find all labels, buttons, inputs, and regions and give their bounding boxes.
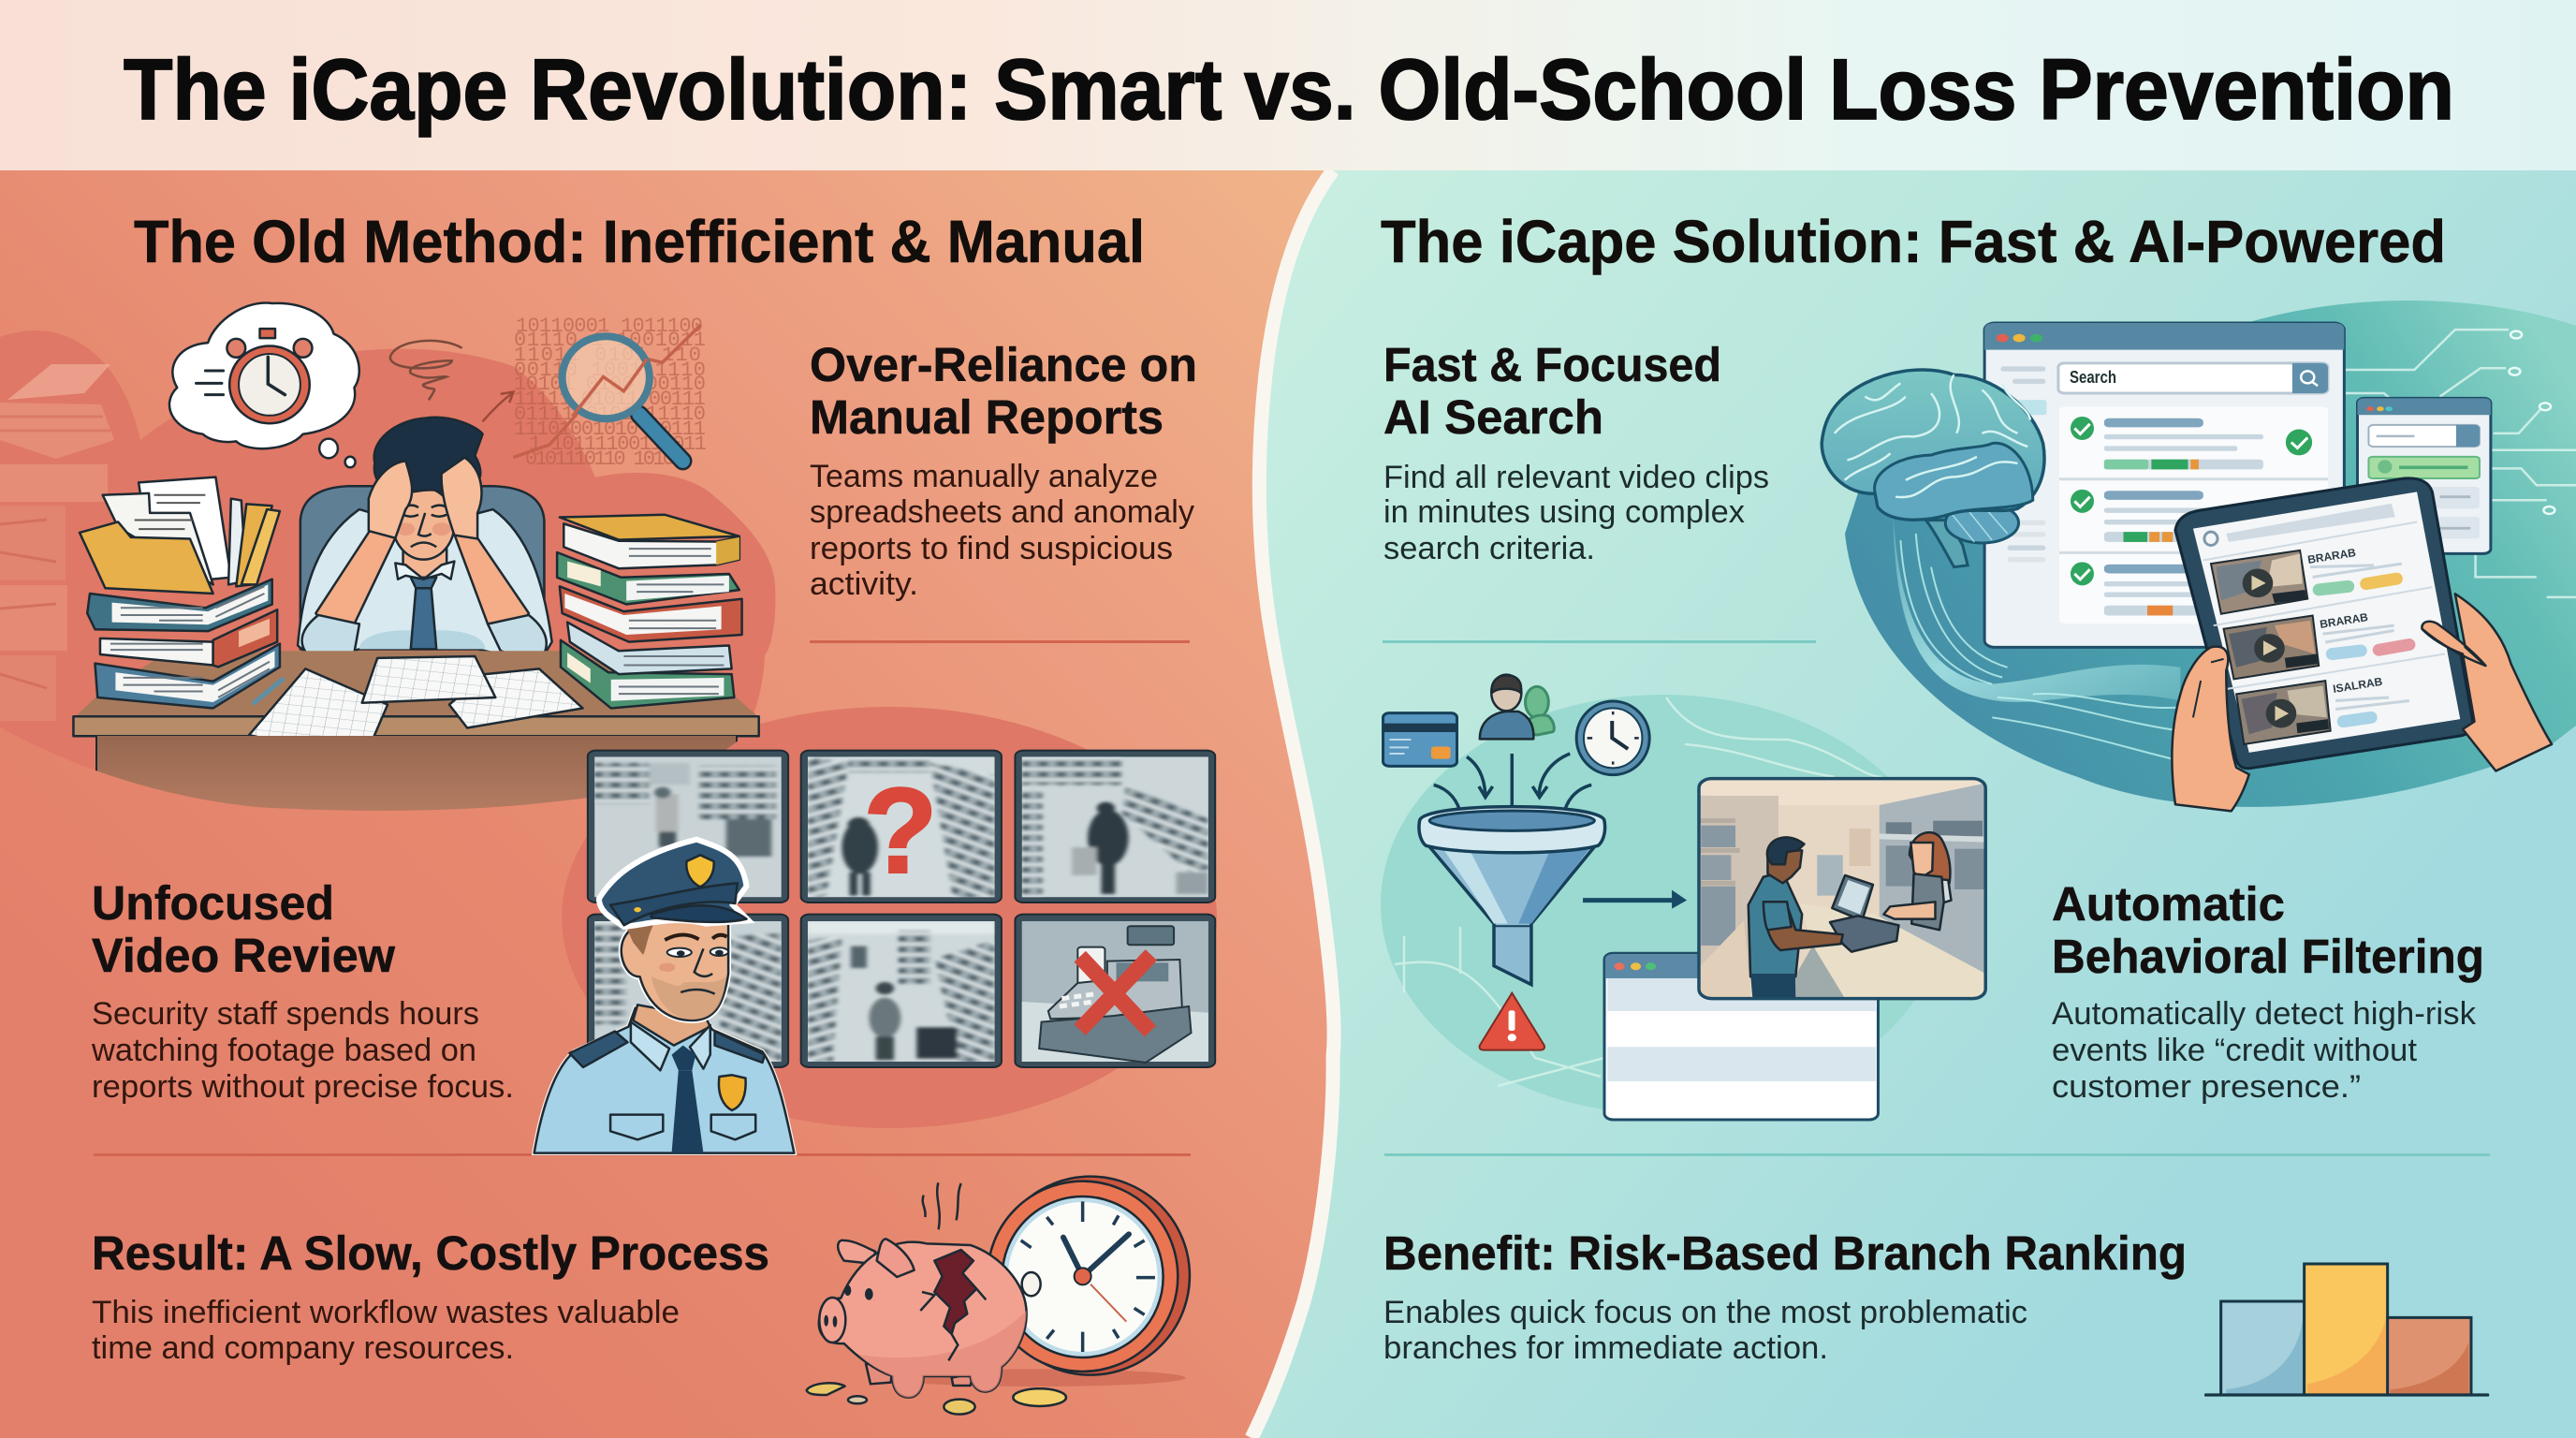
bar: yellow <box>2305 1264 2388 1395</box>
text block: over-reliance on manual reports: spreadsheets and anomaly <box>810 494 1194 530</box>
bar: blue <box>2221 1301 2305 1395</box>
worker <box>298 418 552 664</box>
tablet video labels: ISALRAB <box>2332 675 2383 696</box>
binary data background: 11011 0101 110 <box>514 344 701 367</box>
input arrows <box>1434 754 1591 821</box>
icon: people <box>1480 675 1554 739</box>
icon: stress squiggle <box>390 341 462 400</box>
baseline <box>2204 1393 2489 1397</box>
text block: automatic behavioral filtering: Behavioral Filtering <box>2052 930 2484 983</box>
stack: left binders and folder <box>80 477 283 708</box>
result row 2 <box>2071 490 2263 542</box>
binary data background: 10110001 1011100 <box>516 315 703 338</box>
text block: automatic behavioral filtering: events like “credit without <box>2052 1033 2418 1068</box>
text block: unfocused video review <box>91 876 514 1105</box>
stack: right binders <box>557 515 742 708</box>
left blob behind desk <box>0 330 775 811</box>
heading: old method: The Old Method: Inefficient & Manual <box>134 208 1145 275</box>
right bottom round shape <box>1381 695 1946 1114</box>
main search window <box>1984 323 2344 647</box>
curved divider <box>1251 170 1334 1438</box>
text block: over-reliance on manual reports: Teams manually analyze <box>810 459 1158 494</box>
text block: unfocused video review: reports without precise focus. <box>92 1069 514 1105</box>
icon: question mark: ? <box>863 762 938 899</box>
icon: credit card <box>1383 713 1457 766</box>
text block: over-reliance on manual reports: Over-Reliance on <box>810 338 1197 391</box>
binary data background: 01110 1 1001011 <box>514 329 706 352</box>
clock <box>988 1177 1190 1375</box>
monitor 5 <box>801 915 1002 1067</box>
icon: brain <box>1822 370 2044 567</box>
text block: unfocused video review: Video Review <box>92 929 395 982</box>
coins <box>807 1383 1066 1415</box>
monitor 6 with cash register <box>1015 915 1215 1067</box>
text block: over-reliance on manual reports: activity. <box>810 566 918 602</box>
spreadsheets on desk <box>249 656 583 758</box>
video thumbnail 3 <box>2236 681 2331 744</box>
binary data background: 11111 01011 00111 <box>514 388 706 411</box>
text block: automatic behavioral filtering: customer presence.” <box>2052 1069 2361 1105</box>
text block: result <box>92 1226 769 1366</box>
tablet <box>2175 478 2473 769</box>
text block: automatic behavioral filtering: Automatic <box>2052 877 2285 931</box>
title: The iCape Revolution: Smart vs. Old-School Loss Prevention <box>124 42 2454 138</box>
small search window <box>2358 398 2491 553</box>
bar chart: branch ranking <box>2204 1264 2489 1397</box>
illustration: stressed worker at desk <box>73 303 759 758</box>
text block: over-reliance on manual reports: Manual Reports <box>810 390 1164 444</box>
text block: over-reliance on manual reports: reports to find suspicious <box>810 531 1173 566</box>
desk <box>73 651 759 736</box>
left hand <box>2172 647 2249 811</box>
video thumbnail 1 <box>2211 550 2307 614</box>
text block: over-reliance on manual reports <box>810 338 1197 602</box>
right top teal shape <box>1845 301 2576 807</box>
arrow to photo <box>1583 898 1676 902</box>
icon: funnel <box>1419 807 1605 985</box>
woman <box>1910 832 1950 883</box>
binary data background <box>514 315 707 471</box>
text block: result: This inefficient workflow wastes valuable <box>92 1295 680 1330</box>
text block: fast and focused ai search: Find all relevant video clips <box>1383 460 1769 495</box>
text block: benefit: Benefit: Risk-Based Branch Ranking <box>1383 1226 2187 1280</box>
monitor 4 <box>588 915 788 1067</box>
binary data background: 00110 1001 1110 <box>514 359 706 382</box>
circuit lines <box>2346 330 2576 597</box>
text block: automatic behavioral filtering <box>2052 877 2484 1105</box>
chart: trend line <box>514 325 701 458</box>
desk lower body <box>95 736 738 811</box>
circuit traces in round shape <box>1395 697 1881 1086</box>
monitors and guard <box>534 751 1215 1153</box>
binary data background: 01111 0101 11110 <box>514 403 706 426</box>
lower blob behind monitors <box>562 707 1217 1128</box>
text block: unfocused video review: Unfocused <box>92 876 334 930</box>
binary data background: 0101110110 1010 <box>525 448 675 471</box>
text block: automatic behavioral filtering: Automatically detect high-risk <box>2052 996 2477 1032</box>
text block: result: Result: A Slow, Costly Process <box>92 1226 769 1280</box>
text block: result: time and company resources. <box>92 1330 514 1366</box>
monitor 3 <box>1015 751 1215 902</box>
text block: fast and focused ai search: in minutes using complex <box>1383 494 1745 530</box>
video thumbnail 2 <box>2224 615 2319 679</box>
result row 3 <box>2071 562 2263 615</box>
text block: unfocused video review: Security staff spends hours <box>92 996 479 1032</box>
store photo <box>1699 779 1985 999</box>
icon: magnifying glass <box>563 336 683 461</box>
tablet video labels: BRARAB <box>2306 546 2357 566</box>
icon: wall clock <box>1576 701 1649 775</box>
text block: fast and focused ai search: search criteria. <box>1383 531 1595 566</box>
chair <box>300 486 544 649</box>
bar: orange <box>2388 1317 2471 1395</box>
monitor 2 with question mark <box>801 751 1002 902</box>
icon: arrow to analysis <box>483 392 514 421</box>
illustration: behavioral filtering <box>1383 675 1985 1120</box>
tablet video labels: BRARAB <box>2319 610 2369 631</box>
register <box>1832 875 1873 920</box>
guard head <box>622 920 728 1020</box>
icon: warning triangle <box>1480 993 1544 1050</box>
background: old method panel <box>0 170 1334 1438</box>
tablet video labels <box>2306 546 2383 696</box>
text block: unfocused video review: watching footage based on <box>91 1033 476 1068</box>
heading: icape solution: The iCape Solution: Fast & AI-Powered <box>1381 208 2446 275</box>
text block: benefit: branches for immediate action. <box>1383 1330 1828 1366</box>
piggy bank <box>819 1182 1041 1398</box>
binary data background: 11101001010 10111 <box>514 418 706 441</box>
header band <box>0 0 2576 170</box>
ai data stream <box>1893 514 2180 702</box>
detail lines and tags <box>2310 564 2409 709</box>
text block: fast and focused ai search <box>1383 338 1769 566</box>
text block: benefit: Enables quick focus on the most problematic <box>1383 1295 2027 1330</box>
illustration: ai search <box>1822 323 2576 811</box>
guard <box>534 840 794 1153</box>
monitor 1 <box>588 751 788 902</box>
man <box>1749 873 1802 976</box>
text block: benefit <box>1383 1226 2187 1366</box>
text block: fast and focused ai search: AI Search <box>1383 390 1603 444</box>
shadow <box>886 1369 1186 1387</box>
search label: Search <box>2070 368 2116 387</box>
faded paper piles <box>0 364 114 721</box>
browser window <box>1604 953 1878 1120</box>
text block: fast and focused ai search: Fast & Focused <box>1383 338 1721 391</box>
illustration: broken piggy bank and clock <box>807 1177 1190 1415</box>
binary data background: 10101 0100 00110 <box>514 373 706 396</box>
icon: red x <box>1080 955 1151 1032</box>
binary data background: 1 1011110011 011 <box>529 433 707 456</box>
guard cap <box>599 840 749 927</box>
result row 1 <box>2071 417 2312 469</box>
right hand <box>2422 594 2552 771</box>
icon: thought cloud with stopwatch <box>169 303 359 467</box>
